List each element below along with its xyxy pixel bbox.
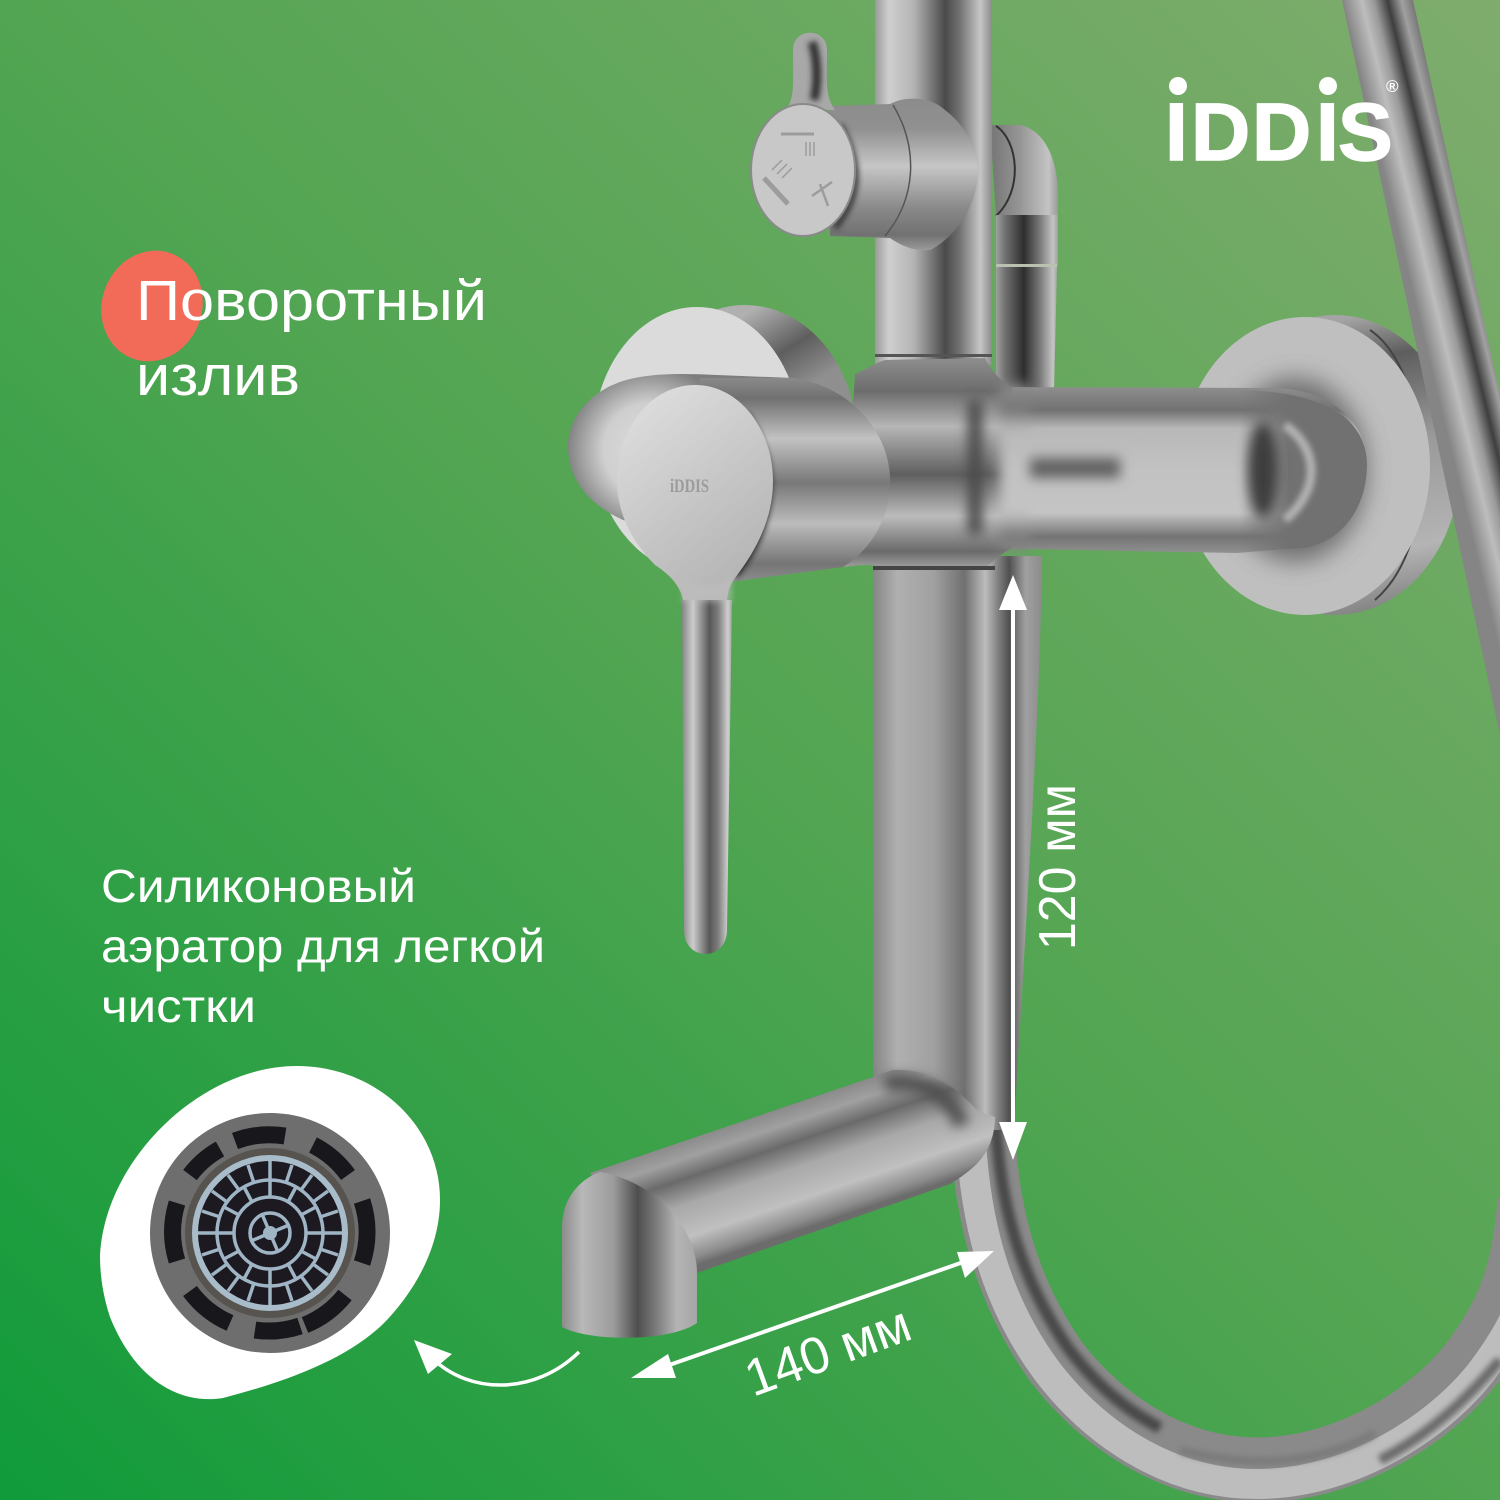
dimension label: 140 mm: 140 мм (737, 1295, 919, 1408)
aerator caption: аэратор для легкой (101, 920, 545, 972)
aerator image (150, 1113, 390, 1353)
logo: ® (1386, 77, 1399, 96)
lower vertical pipe (873, 560, 995, 1117)
mixer handle face: iDDIS (670, 476, 709, 497)
mixer body junction (843, 358, 1030, 568)
curved arrow to aerator (414, 1340, 579, 1385)
dimension label: 120 mm: 120 мм (1029, 784, 1087, 950)
mixer lever (682, 575, 732, 954)
dimension arrow: 120 mm (999, 575, 1027, 1160)
diverter switch (751, 33, 978, 250)
left wall flange (593, 305, 857, 575)
white blob (100, 1066, 440, 1399)
aerator caption: Силиконовый (101, 860, 416, 912)
elbow and riser tube (990, 125, 1058, 392)
hose loop (970, 1120, 1500, 1484)
heading: излив (136, 344, 300, 408)
aerator caption: чистки (101, 980, 256, 1032)
spout (562, 1070, 995, 1338)
aerator caption (101, 860, 545, 1032)
heading (136, 269, 487, 408)
dimension arrow: 140 mm (631, 1251, 994, 1378)
aerator callout (100, 1066, 440, 1399)
upper vertical pipe (875, 0, 992, 365)
right wall flange (1180, 315, 1460, 615)
upper hose (1342, 0, 1500, 735)
mixer rear lobe (568, 374, 793, 540)
logo: IDDIS (1165, 87, 1393, 178)
mixer handle cylinder (690, 378, 890, 582)
accent blob (86, 236, 218, 376)
shower product (562, 0, 1500, 1484)
heading: Поворотный (136, 269, 487, 333)
joint collars (873, 354, 995, 570)
thin hose behind lower pipe (990, 556, 1042, 1130)
right horizontal arm (975, 387, 1367, 553)
mixer handle face (617, 385, 773, 605)
